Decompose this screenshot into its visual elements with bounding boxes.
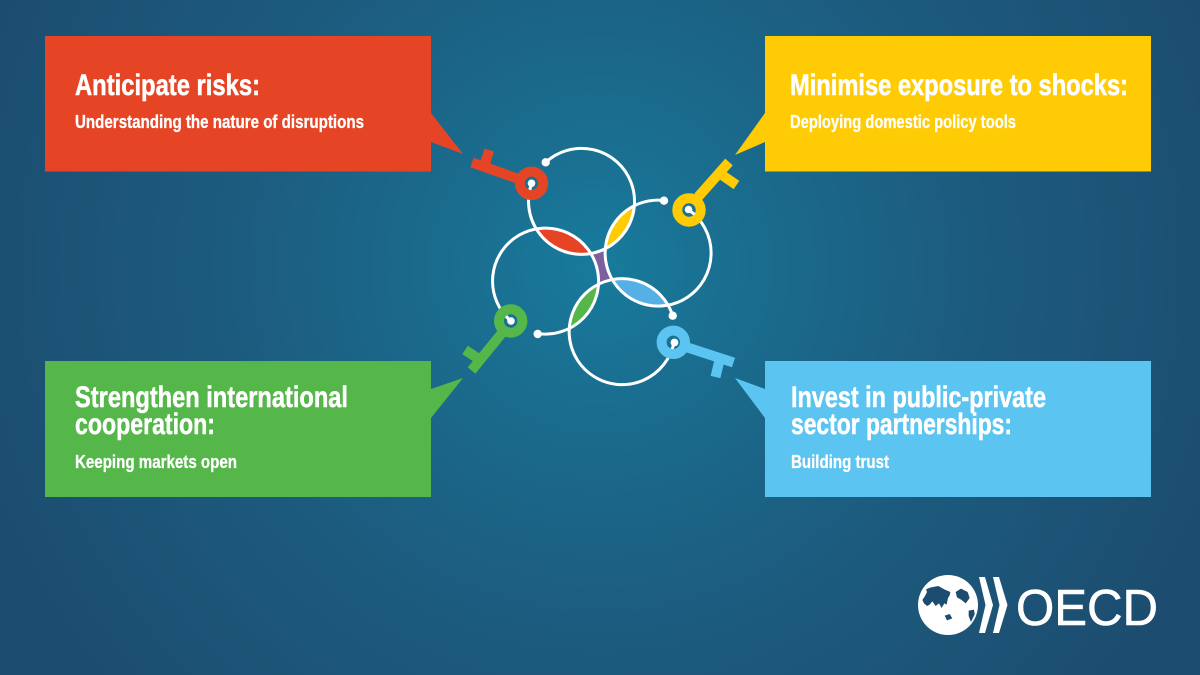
- heading: invest in partnerships: [791, 381, 1046, 441]
- text: domestic policy tools: Deploying domestic policy tools: [790, 112, 1016, 132]
- heading: strengthen international cooperation: Strengthen international: [75, 381, 348, 414]
- overlap: green: [571, 287, 597, 326]
- heading: invest in partnerships: sector partnerships:: [791, 408, 1012, 441]
- icon: green key: [465, 309, 522, 370]
- logo wordmark: OECD: [1016, 579, 1158, 636]
- panel: public-private partnerships: [735, 361, 1151, 497]
- logo globe: [918, 575, 978, 635]
- heading: strengthen international cooperation: cooperation:: [75, 408, 215, 441]
- ring: left: [493, 228, 599, 338]
- logo chevrons: [979, 577, 1008, 633]
- panel: international cooperation: [45, 361, 463, 497]
- heading: invest in partnerships: Invest in public-private: [791, 381, 1046, 414]
- icon: red key: [472, 150, 543, 195]
- icon: blue key: [662, 331, 734, 377]
- diagram: interlocking rings: [492, 148, 711, 385]
- panel: minimise exposure: [735, 36, 1151, 172]
- overlap: purple centre: [590, 249, 612, 284]
- icon: yellow key: [677, 162, 736, 222]
- overlap: yellow: [607, 208, 632, 246]
- heading: anticipate risks: Anticipate risks:: [75, 69, 260, 102]
- text: keeping markets open: Keeping markets open: [75, 452, 237, 472]
- text: understanding disruptions: Understanding the nature of disruptions: [75, 112, 364, 132]
- heading: strengthen international cooperation: [75, 381, 348, 441]
- logo: OECD: [918, 575, 1158, 636]
- overlap: red: [538, 230, 588, 253]
- ring: top: [529, 148, 635, 254]
- overlap: blue: [614, 280, 666, 305]
- ring: bottom: [569, 279, 677, 385]
- text: building trust: Building trust: [791, 452, 889, 472]
- panel: anticipate risks: [45, 36, 463, 172]
- ring: right: [605, 196, 711, 306]
